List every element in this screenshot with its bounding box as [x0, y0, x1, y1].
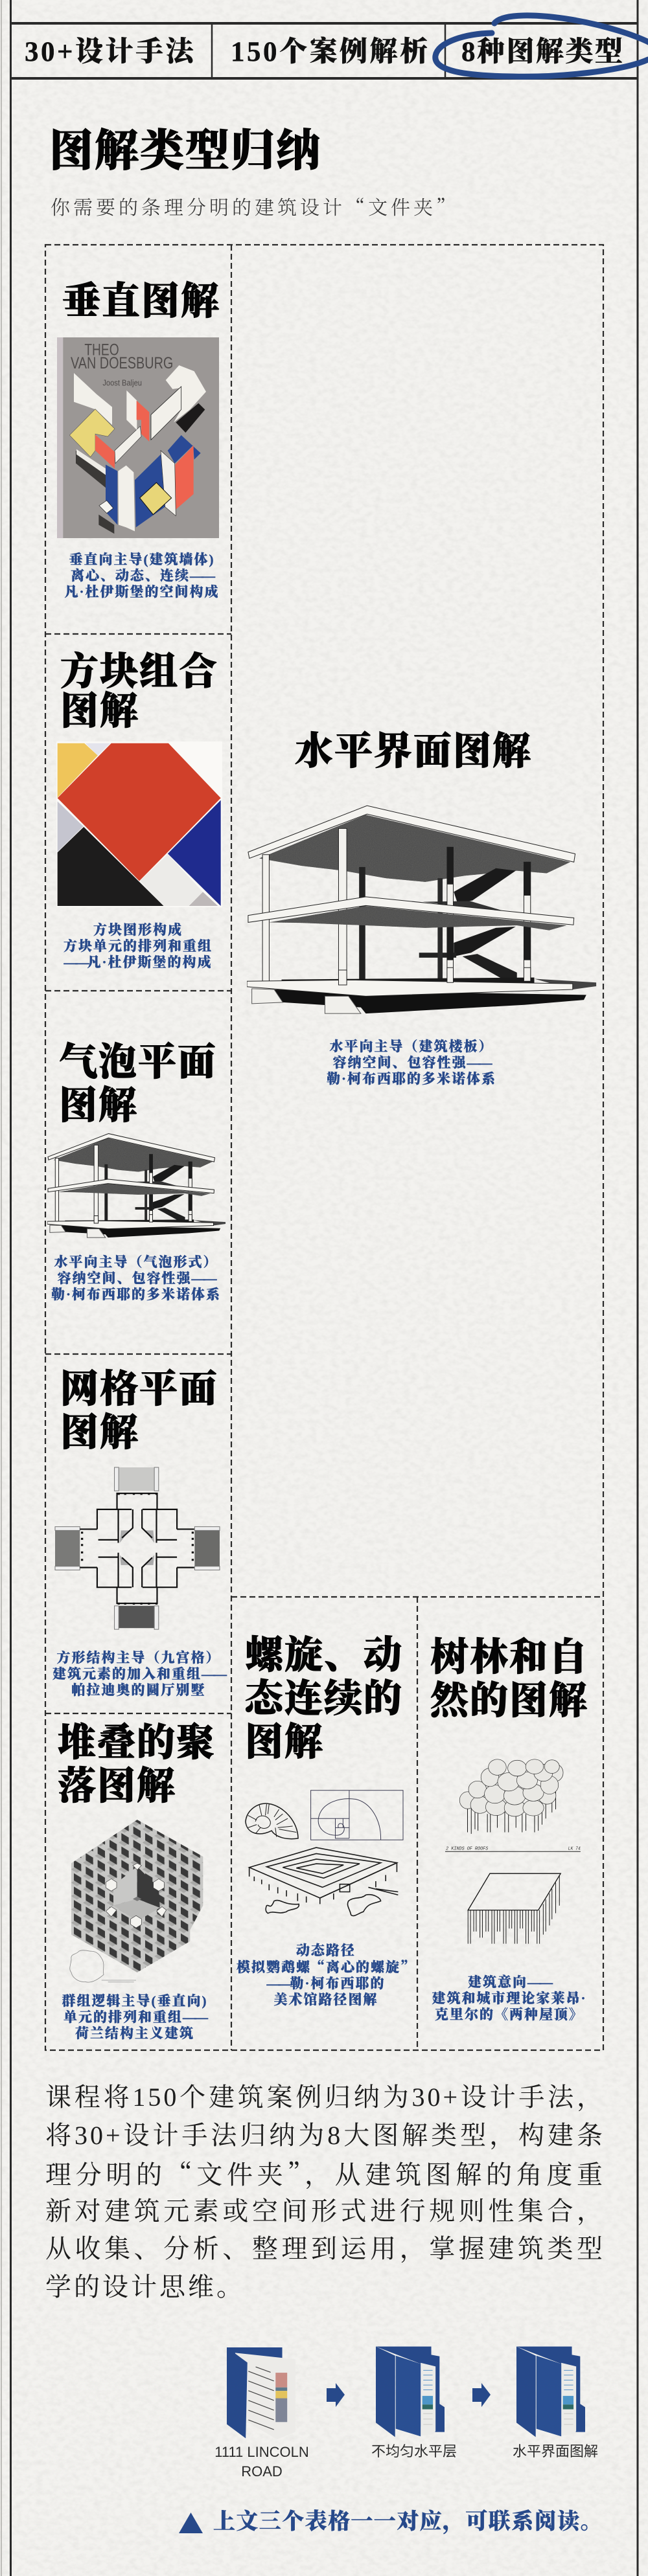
image: Theo van Doesburg book cover: THEO [84, 341, 119, 359]
caption: 垂直向主导(建筑墙体) [69, 552, 215, 567]
icon: folder 水平界面图解 [516, 2346, 585, 2437]
image: Doesburg composition [56, 741, 222, 907]
image: nautilus, golden spiral and museum plan [244, 1788, 403, 1919]
caption: 美术馆路径图解 [273, 1992, 378, 2007]
caption [314, 1039, 509, 1087]
panel: 水平界面图解 [231, 245, 603, 1597]
heading: 网格平面 [60, 1368, 218, 1410]
title: 图解类型归纳 [49, 126, 321, 175]
caption: 容纳空间、包容性强—— [333, 1055, 490, 1070]
body text: 理分明的“文件夹”，从建筑图解的角度重 [45, 2154, 605, 2191]
caption: 群组逻辑主导(垂直向) [62, 1993, 207, 2009]
image: Villa Rotonda plan [54, 1467, 220, 1630]
body text: 学的设计思维。 [45, 2272, 245, 2301]
caption: 动态路径 [296, 1943, 356, 1958]
tab: 30+设计手法: 30+设计手法 [25, 37, 196, 67]
heading: 气泡平面 [59, 1041, 217, 1083]
panel: 气泡平面图解 [47, 1041, 226, 1302]
body text: 新对建筑元素或空间形式进行规则性集合， [45, 2197, 605, 2226]
caption: 建筑元素的加入和重组—— [52, 1666, 225, 1682]
caption: 方块图形构成 [93, 922, 183, 938]
icon: folder 1111 Lincoln Road [227, 2347, 295, 2439]
heading: 图解 [60, 690, 139, 732]
label: 不均匀水平层 [371, 2443, 457, 2459]
caption [38, 1993, 232, 2042]
arrow [327, 2383, 345, 2407]
caption: 建筑意向—— [468, 1974, 551, 1990]
image: Theo van Doesburg book cover: VAN DOESBURG [71, 354, 173, 372]
heading: 树林和自 [430, 1636, 588, 1678]
caption: 单元的排列和重组—— [64, 2009, 206, 2025]
caption [52, 1650, 227, 1698]
note text: 上文三个表格一一对应，可联系阅读。 [213, 2510, 603, 2534]
caption: 帕拉迪奥的圆厅别墅 [71, 1682, 206, 1698]
caption: ——勒·柯布西耶的 [266, 1976, 385, 1991]
panel: 树林和自然的图解 [417, 1597, 603, 2050]
heading: 垂直图解 [62, 280, 220, 322]
body text [45, 2079, 605, 2307]
image: Domino house large [247, 805, 597, 1016]
heading: 图解 [60, 1411, 139, 1454]
caption: 容纳空间、包容性强—— [57, 1271, 215, 1286]
caption: 荷兰结构主义建筑 [75, 2026, 194, 2041]
caption: 克里尔的《两种屋顶》 [435, 2007, 584, 2022]
caption [64, 552, 219, 600]
caption: 勒·柯布西耶的多米诺体系 [327, 1071, 496, 1087]
caption [64, 922, 213, 970]
note [178, 2507, 606, 2537]
caption: 方形结构主导（九宫格） [57, 1650, 220, 1666]
tab bar [12, 22, 636, 80]
heading: 水平界面图解 [295, 730, 532, 773]
tab: 8种图解类型: 8种图解类型 [461, 37, 625, 67]
icon: hand-drawn blue circle [432, 12, 648, 80]
caption: 凡·杜伊斯堡的空间构成 [64, 584, 219, 600]
caption: 方块单元的排列和重组 [64, 938, 213, 954]
caption: ——凡·杜伊斯堡的构成 [64, 955, 213, 970]
caption: 水平向主导（气泡形式） [54, 1254, 218, 1270]
heading: 方块组合 [60, 650, 218, 693]
caption [229, 1943, 423, 2008]
heading: 堆叠的聚 [58, 1721, 216, 1764]
heading: 落图解 [58, 1765, 176, 1807]
caption: 模拟鹦鹉螺“离心的螺旋” [237, 1957, 415, 1976]
subtitle: 你需要的条理分明的建筑设计“文件夹” [51, 192, 459, 220]
icon: triangle [179, 2513, 203, 2533]
label: 水平界面图解 [513, 2443, 598, 2459]
panel: 网格平面图解 [52, 1368, 227, 1698]
tab: 150个案例解析: 150个案例解析 [231, 37, 430, 67]
body text: 课程将150个建筑案例归纳为30+设计手法， [45, 2083, 605, 2112]
tab rules [12, 22, 636, 80]
caption: 水平向主导（建筑楼板） [329, 1039, 494, 1054]
label: 1111 LINCOLN [214, 2444, 309, 2460]
heading: 图解 [245, 1721, 324, 1763]
image: Domino house small [47, 1133, 226, 1238]
body text: 从收集、分析、整理到运用，掌握建筑类型 [45, 2234, 605, 2263]
caption [412, 1974, 607, 2023]
panel: 垂直图解 [57, 280, 220, 600]
arrow [472, 2383, 491, 2407]
folder diagram [214, 2344, 596, 2483]
heading: 然的图解 [430, 1679, 588, 1722]
image: Theo van Doesburg book cover [57, 337, 219, 538]
image: structuralist cluster [65, 1816, 214, 1988]
heading: 态连续的 [245, 1677, 403, 1720]
caption [51, 1254, 221, 1302]
icon: folder 不均匀水平层 [376, 2346, 445, 2437]
heading: 图解 [59, 1084, 138, 1127]
body text: 将30+设计手法归纳为8大图解类型，构建条 [45, 2121, 605, 2150]
image: Léon Krier two kinds of roofs: LK 74 [568, 1846, 581, 1851]
heading [60, 650, 218, 732]
label: ROAD [241, 2463, 283, 2480]
panel: 螺旋、动态连续的图解 [231, 1597, 417, 2050]
caption: 建筑和城市理论家莱昂· [432, 1991, 587, 2006]
caption: 勒·柯布西耶的多米诺体系 [51, 1287, 221, 1302]
heading [58, 1721, 216, 1808]
heading [60, 1368, 218, 1454]
heading [430, 1636, 588, 1723]
panel: 堆叠的聚落图解 [45, 1713, 231, 2050]
label [214, 2443, 310, 2481]
heading: 螺旋、动 [245, 1634, 403, 1677]
panel: 方块组合图解 [56, 650, 222, 970]
heading [59, 1041, 217, 1127]
heading [245, 1634, 404, 1764]
caption: 离心、动态、连续—— [71, 568, 213, 583]
image: Léon Krier two kinds of roofs: 2 KINDS OF ROOFS [446, 1846, 488, 1851]
image: Theo van Doesburg book cover: Joost Baljeu [102, 379, 142, 388]
image: Léon Krier two kinds of roofs [445, 1757, 581, 1945]
